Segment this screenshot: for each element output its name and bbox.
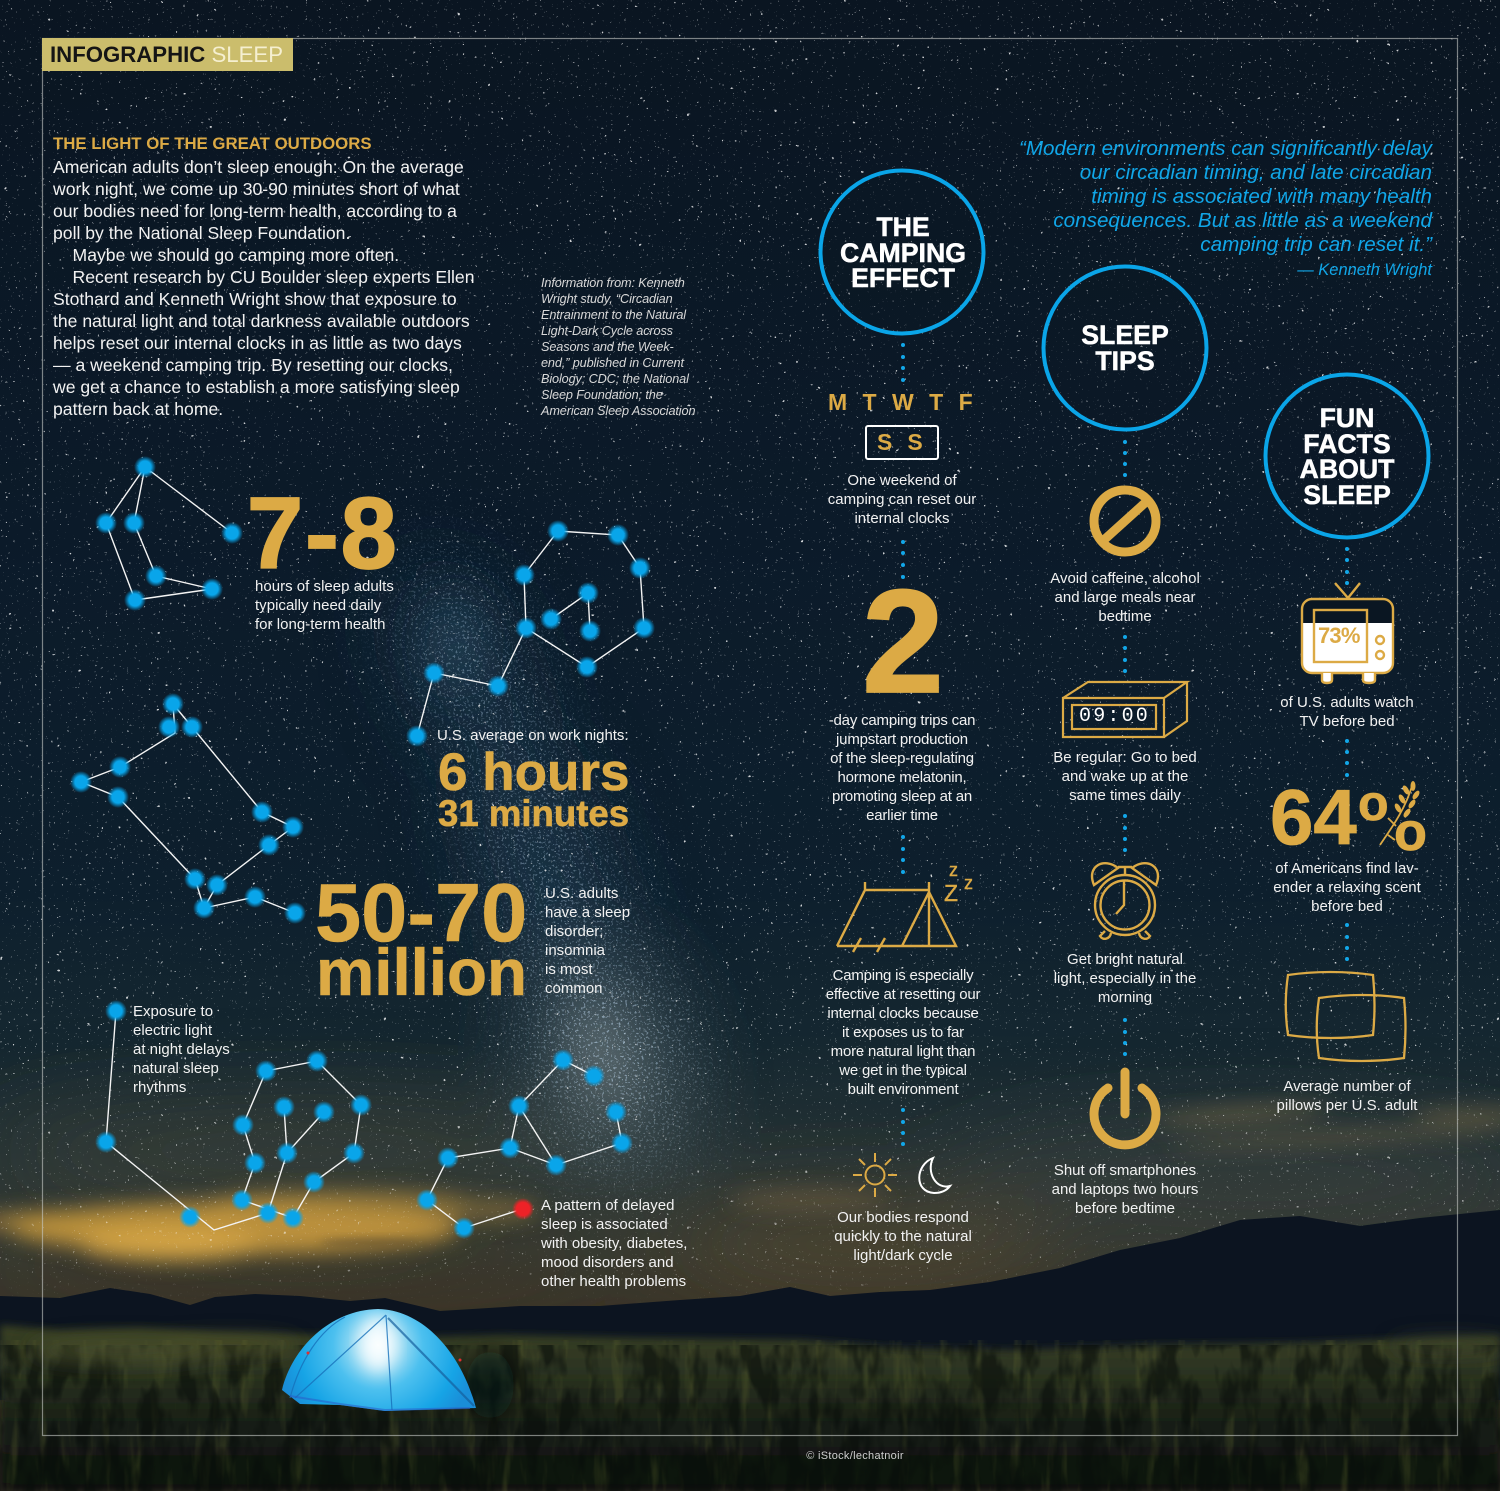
icon: moon: [919, 1158, 950, 1193]
stat: 7-8 hours: 7-8: [247, 478, 399, 590]
heading: the camping effect: EFFECT: [851, 263, 955, 293]
heading: the camping effect: CAMPING: [840, 238, 966, 268]
caption: be regular: Be regular: Go to bed: [1053, 749, 1197, 766]
tent zzz: z: [949, 860, 958, 880]
caption: shut off smartphones: Shut off smartphones: [1054, 1162, 1196, 1179]
intro heading: THE LIGHT OF THE GREAT OUTDOORS: [53, 134, 372, 153]
caption: lavender: ender a relaxing scent: [1273, 879, 1421, 896]
caption: lavender: of Americans find lav-: [1275, 860, 1419, 877]
icon: prohibited sign: [1094, 490, 1156, 552]
caption: camping is especially effective: effective at resetting our: [826, 986, 980, 1003]
caption: hours of sleep: [255, 578, 394, 633]
heading: the camping effect: [840, 212, 966, 293]
caption: camping is especially effective: we get in the typical: [839, 1062, 967, 1079]
intro text: [53, 157, 474, 419]
caption: delayed sleep: A pattern of delayed: [541, 1197, 674, 1214]
icon: tent line drawing: [837, 882, 956, 952]
sources note: Information from: Kenneth: [541, 276, 685, 290]
constellation: near 7-8 hours: [95, 456, 243, 611]
caption: one weekend: camping can reset our: [828, 491, 976, 508]
caption: sleep disorder: U.S. adults: [545, 885, 618, 902]
caption: pillows: Average number of: [1283, 1078, 1411, 1095]
icon: digital alarm clock: [1063, 682, 1187, 737]
caption: bright natural light: [1054, 951, 1196, 1006]
caption: camping is especially effective: more natural light than: [831, 1043, 975, 1060]
intro text: our bodies need for long-term health, according to a: [53, 201, 457, 221]
caption: bright natural light: Get bright natural: [1067, 951, 1183, 968]
sources note: American Sleep Association: [541, 404, 695, 418]
pull quote: — Kenneth Wright: [1297, 261, 1432, 279]
sources note: end,” published in Current: [541, 356, 684, 370]
caption: electric light: at night delays: [133, 1041, 230, 1058]
constellation: near 6 hours 31 minutes: [406, 520, 655, 747]
stat: 2: 2: [862, 560, 944, 724]
caption: lavender: before bed: [1311, 898, 1383, 915]
caption: sleep disorder: have a sleep: [545, 904, 630, 921]
tent zzz: z: [964, 873, 973, 893]
caption: natural light dark cycle: light/dark cycle: [853, 1247, 953, 1264]
caption: hours of sleep: for long-term health: [255, 616, 385, 633]
heading: the camping effect: THE: [876, 212, 930, 242]
caption: camping is especially effective: [826, 967, 980, 1098]
caption: day camping trips: jumpstart production: [836, 731, 968, 748]
pull quote: [1019, 137, 1433, 279]
stat: million: million: [316, 936, 527, 1009]
heading: fun facts about sleep: [1300, 403, 1394, 510]
icon: sun: [853, 1153, 897, 1197]
caption: shut off smartphones: before bedtime: [1075, 1200, 1175, 1217]
intro text: helps reset our internal clocks in as little as two days: [53, 333, 462, 353]
heading: fun facts about sleep: FACTS: [1303, 428, 1391, 458]
heading: fun facts about sleep: SLEEP: [1303, 480, 1391, 510]
stat: 64 percent: [1270, 773, 1427, 862]
caption: be regular: and wake up at the: [1062, 768, 1188, 785]
caption: sleep disorder: is most: [545, 961, 593, 978]
caption: day camping trips: -day camping trips can: [829, 712, 975, 729]
sources note: [540, 276, 695, 418]
stat: 31 minutes: 31 minutes: [438, 793, 629, 834]
intro text: work night, we come up 30-90 minutes short of what: [53, 179, 460, 199]
intro text: Recent research by CU Boulder sleep experts Ellen: [73, 267, 474, 287]
caption: shut off smartphones: and laptops two hours: [1052, 1181, 1198, 1198]
stat: 6 hours: 6 hours: [438, 743, 629, 802]
caption: watch tv: of U.S. adults watch: [1280, 694, 1414, 711]
sources note: Entrainment to the Natural: [541, 308, 686, 322]
icon: lavender sprig: [1380, 781, 1421, 845]
icon: wind-up alarm clock: [1092, 863, 1158, 939]
caption: sleep disorder: disorder;: [545, 923, 603, 940]
caption: one weekend: One weekend of: [847, 472, 957, 489]
pull quote: timing is associated with many health: [1091, 185, 1432, 208]
caption: pillows: [1277, 1078, 1418, 1114]
stat: 50-70 million: 50-70: [315, 866, 527, 959]
caption: day camping trips: [829, 712, 975, 824]
tent zzz: [944, 860, 973, 906]
sources note: Sleep Foundation; the: [541, 388, 663, 402]
caption: day camping trips: promoting sleep at an: [832, 788, 972, 805]
sources note: Wright study, “Circadian: [541, 292, 673, 306]
sources note: Seasons and the Week-: [541, 340, 674, 354]
caption: natural light dark cycle: [834, 1209, 972, 1264]
caption: watch tv: [1280, 694, 1414, 730]
weekend days: SS: [877, 429, 938, 455]
heading: sleep tips: TIPS: [1095, 346, 1155, 376]
intro text: American adults don’t sleep enough: On the average: [53, 157, 464, 177]
constellation: near 50-70 million: [70, 693, 306, 924]
caption: delayed sleep: mood disorders and: [541, 1254, 674, 1271]
caption: be regular: [1053, 749, 1197, 804]
caption: camping is especially effective: Camping is especially: [833, 967, 973, 984]
caption: one weekend: internal clocks: [854, 510, 950, 527]
intro text: poll by the National Sleep Foundation.: [53, 223, 350, 243]
icon: two pillows: [1286, 972, 1406, 1061]
caption: electric light: rhythms: [133, 1079, 186, 1096]
stat: 64 percent: o: [1358, 775, 1389, 831]
caption: bright natural light: morning: [1098, 989, 1152, 1006]
intro text: pattern back at home.: [53, 399, 223, 419]
caption: delayed sleep: [541, 1197, 687, 1290]
stat: 64 percent: o: [1394, 802, 1427, 862]
caption: avoid caffeine: bedtime: [1098, 608, 1152, 625]
constellation: ending in red star: [416, 1049, 633, 1239]
caption: electric light: [133, 1003, 230, 1096]
intro text: Stothard and Kenneth Wright show that exposure to: [53, 289, 457, 309]
pull quote: our circadian timing, and late circadian: [1080, 161, 1432, 184]
weekdays: MTWTF: [828, 389, 988, 415]
caption: day camping trips: of the sleep-regulating: [830, 750, 974, 767]
intro text: we get a chance to establish a more satisfying sleep: [53, 377, 460, 397]
caption: natural light dark cycle: quickly to the natural: [834, 1228, 972, 1245]
caption: delayed sleep: with obesity, diabetes,: [541, 1235, 687, 1252]
tag: infographic sleep: INFOGRAPHIC SLEEP: [50, 42, 283, 67]
pull quote: consequences. But as little as a weekend: [1053, 209, 1432, 232]
caption: pillows: pillows per U.S. adult: [1277, 1097, 1417, 1114]
tent zzz: Z: [944, 880, 958, 906]
photo credit: © iStock/lechatnoir: [806, 1450, 904, 1462]
caption: hours of sleep: hours of sleep adults: [255, 578, 394, 595]
caption: lavender: [1273, 860, 1421, 915]
constellation: near electric light text: [95, 1000, 372, 1230]
stat: 64 percent: 64: [1270, 773, 1357, 861]
caption: electric light: natural sleep: [133, 1060, 219, 1077]
heading: sleep tips: SLEEP: [1081, 320, 1169, 350]
sources note: Light-Dark Cycle across: [541, 324, 673, 338]
clock display: 09:00: [1079, 705, 1150, 728]
icon: television: [1302, 583, 1393, 683]
caption: delayed sleep: other health problems: [541, 1273, 686, 1290]
caption: sleep disorder: common: [545, 980, 603, 997]
caption: day camping trips: hormone melatonin,: [838, 769, 966, 786]
caption: US average: U.S. average on work nights:: [437, 727, 628, 744]
caption: delayed sleep: sleep is associated: [541, 1216, 668, 1233]
caption: avoid caffeine: and large meals near: [1055, 589, 1195, 606]
intro text: — a weekend camping trip. By resetting our clocks,: [53, 355, 453, 375]
heading: fun facts about sleep: FUN: [1320, 403, 1374, 433]
pull quote: camping trip can reset it.”: [1200, 233, 1432, 256]
illustration: glowing blue tent: [282, 1309, 476, 1411]
caption: camping is especially effective: it exposes us to far: [842, 1024, 964, 1041]
caption: avoid caffeine: [1050, 570, 1200, 625]
caption: shut off smartphones: [1052, 1162, 1198, 1217]
caption: electric light: electric light: [133, 1022, 212, 1039]
caption: day camping trips: earlier time: [866, 807, 938, 824]
intro text: Maybe we should go camping more often.: [73, 245, 399, 265]
icon: power button: [1094, 1072, 1156, 1145]
intro text: the natural light and total darkness available outdoors: [53, 311, 470, 331]
caption: hours of sleep: typically need daily: [255, 597, 381, 614]
heading: sleep tips: [1081, 320, 1169, 376]
caption: avoid caffeine: Avoid caffeine, alcohol: [1050, 570, 1200, 587]
caption: one weekend: [828, 472, 976, 527]
heading: fun facts about sleep: ABOUT: [1300, 454, 1394, 484]
caption: watch tv: TV before bed: [1299, 713, 1395, 730]
caption: bright natural light: light, especially in the: [1054, 970, 1196, 987]
caption: electric light: Exposure to: [133, 1003, 213, 1020]
caption: camping is especially effective: built environment: [848, 1081, 958, 1098]
caption: camping is especially effective: internal clocks because: [827, 1005, 979, 1022]
sources note: Biology; CDC; the National: [541, 372, 689, 386]
pull quote: “Modern environments can significantly delay: [1019, 137, 1432, 160]
icon: weekend box: [866, 426, 938, 459]
caption: sleep disorder: [545, 885, 630, 997]
caption: sleep disorder: insomnia: [545, 942, 605, 959]
stat: 73%: 73%: [1318, 623, 1360, 648]
caption: natural light dark cycle: Our bodies respond: [837, 1209, 969, 1226]
caption: be regular: same times daily: [1069, 787, 1181, 804]
